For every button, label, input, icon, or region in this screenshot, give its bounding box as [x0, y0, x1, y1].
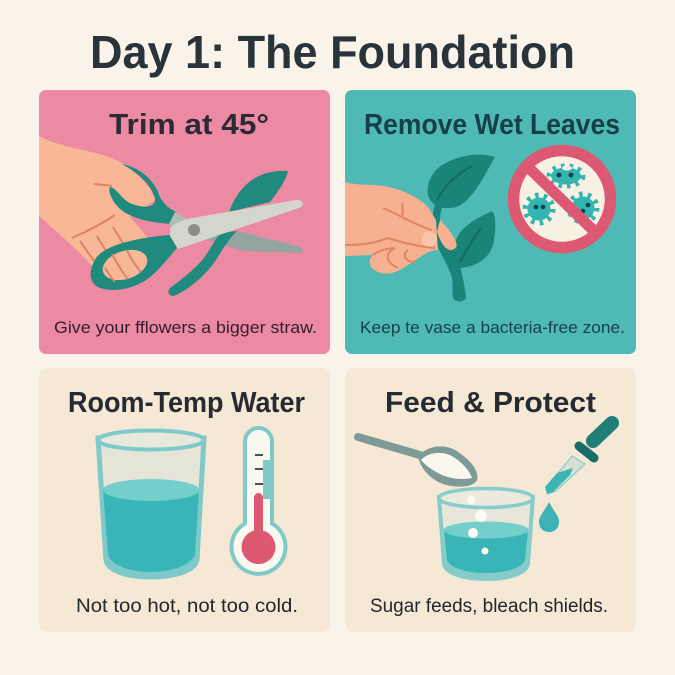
panel: feed and protect	[345, 368, 636, 632]
heading: feed: Feed & Protect	[385, 387, 596, 419]
icon: dropper with drop	[539, 423, 612, 532]
icon: cup with bubbles	[439, 488, 533, 579]
icon: spoon with sugar	[358, 437, 477, 487]
bacterium: right	[570, 194, 596, 222]
icon: hand holding leaf stem	[345, 155, 495, 301]
heading: trim: Trim at 45°	[109, 109, 269, 141]
heading: room temp: Room-Temp Water	[68, 387, 305, 419]
heading: remove: Remove Wet Leaves	[364, 109, 620, 141]
panel: room-temp water	[39, 368, 330, 632]
panel: remove wet leaves	[345, 90, 636, 354]
icon: thermometer	[232, 428, 286, 574]
bacterium: top	[549, 166, 583, 186]
caption: room temp: Not too hot, not too cold.	[76, 596, 298, 617]
icon: no bacteria sign	[514, 150, 610, 248]
bacterium: left	[526, 196, 552, 222]
caption: remove: Keep te vase a bacteria-free zone.	[360, 318, 625, 337]
panel: trim at 45 degrees	[39, 90, 330, 354]
icon: glass of water	[98, 430, 204, 577]
icon: hand holding scissors	[39, 136, 303, 296]
caption: feed: Sugar feeds, bleach shields.	[370, 596, 608, 617]
title: Day 1: The Foundation	[90, 26, 575, 78]
caption: trim: Give your fflowers a bigger straw.	[54, 318, 317, 337]
